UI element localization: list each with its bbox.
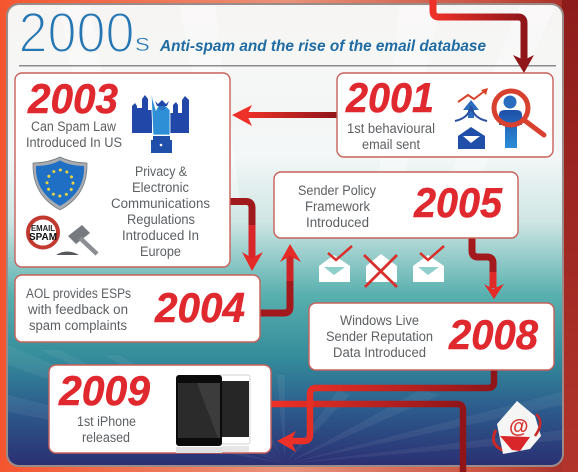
- panel: 2008: [309, 303, 554, 370]
- year 2004: 2004: [154, 284, 245, 331]
- text: AOL feedback: [26, 286, 131, 333]
- text: AOL feedback: spam complaints: [29, 318, 127, 333]
- icon: email with at sign: [493, 401, 541, 454]
- icon: approved envelope: [319, 246, 352, 282]
- panel: 2005: [274, 172, 518, 238]
- panel: 2009: [49, 365, 271, 453]
- text: windows live: Data Introduced: [333, 345, 426, 360]
- icon: email spam stamp: SPAM: [29, 232, 57, 243]
- text: iPhone released: 1st iPhone: [77, 414, 136, 429]
- year 2008: 2008: [448, 311, 539, 358]
- icon: email spam stamp: EMAIL: [31, 224, 55, 233]
- panel: 2001: [337, 73, 553, 157]
- text: sender policy: Introduced: [306, 215, 369, 230]
- icon: tablet: [176, 375, 222, 453]
- text: privacy regulations: Privacy &: [135, 164, 187, 179]
- year 2009: 2009: [58, 367, 151, 414]
- text: privacy regulations: Regulations: [127, 212, 195, 227]
- text: can spam law: Introduced In US: [26, 135, 122, 150]
- icon: person under magnifier: [494, 91, 544, 148]
- icon: email spam stamp: [28, 218, 58, 248]
- text: privacy regulations: Europe: [140, 244, 181, 259]
- text: privacy regulations: Communications: [111, 196, 210, 211]
- text: iPhone released: released: [82, 430, 130, 445]
- panel: 2003: [15, 73, 230, 267]
- text: AOL feedback: with feedback on: [27, 302, 128, 317]
- title: 2000: [18, 1, 134, 65]
- arrow: 2004 to 2005: [260, 244, 301, 313]
- year 2001: 2001: [345, 74, 434, 121]
- icon: phone: [218, 375, 250, 452]
- text: privacy regulations: [111, 164, 210, 259]
- text: windows live: [326, 313, 433, 360]
- arrow: 2003 to 2004: [230, 202, 263, 271]
- panel: 2004: [15, 275, 260, 342]
- text: privacy regulations: Introduced In: [122, 228, 199, 243]
- arrow: 2008 to 2009: [277, 370, 494, 452]
- arrow: 2005 to 2008: [472, 238, 504, 299]
- text: can spam law: [26, 119, 122, 150]
- text: sender policy: Sender Policy: [298, 183, 376, 198]
- text: sender policy: Framework: [305, 199, 370, 214]
- icon: approved envelope: [413, 246, 444, 282]
- arrow: 2009 out to bottom: [271, 404, 463, 472]
- text: iPhone released: [77, 414, 136, 445]
- icon: gavel: [56, 225, 97, 255]
- icon: statue of liberty skyline: [132, 89, 189, 153]
- title: [18, 1, 486, 65]
- icon: EU shield: [33, 157, 87, 210]
- year 2003: 2003: [27, 75, 118, 122]
- text: behavioural email: email sent: [362, 137, 420, 152]
- icon: rejected envelope: [364, 254, 397, 287]
- arrow: into 2001: [433, 0, 534, 73]
- icon: email with at sign: @: [509, 416, 529, 438]
- icon: behaviour chart and envelope: [455, 88, 488, 149]
- text: behavioural email: [347, 121, 435, 152]
- text: windows live: Sender Reputation: [326, 329, 433, 344]
- text: sender policy: [298, 183, 376, 230]
- text: windows live: Windows Live: [340, 313, 419, 328]
- title: s: [135, 29, 150, 57]
- text: AOL feedback: AOL provides ESPs: [26, 286, 131, 301]
- title: Anti-spam and the rise of the email database: [159, 38, 486, 55]
- text: behavioural email: 1st behavioural: [347, 121, 435, 136]
- text: can spam law: Can Spam Law: [31, 119, 116, 134]
- year 2005: 2005: [413, 179, 503, 226]
- arrow: 2001 to 2003: [232, 105, 337, 126]
- text: privacy regulations: Electronic: [132, 180, 189, 195]
